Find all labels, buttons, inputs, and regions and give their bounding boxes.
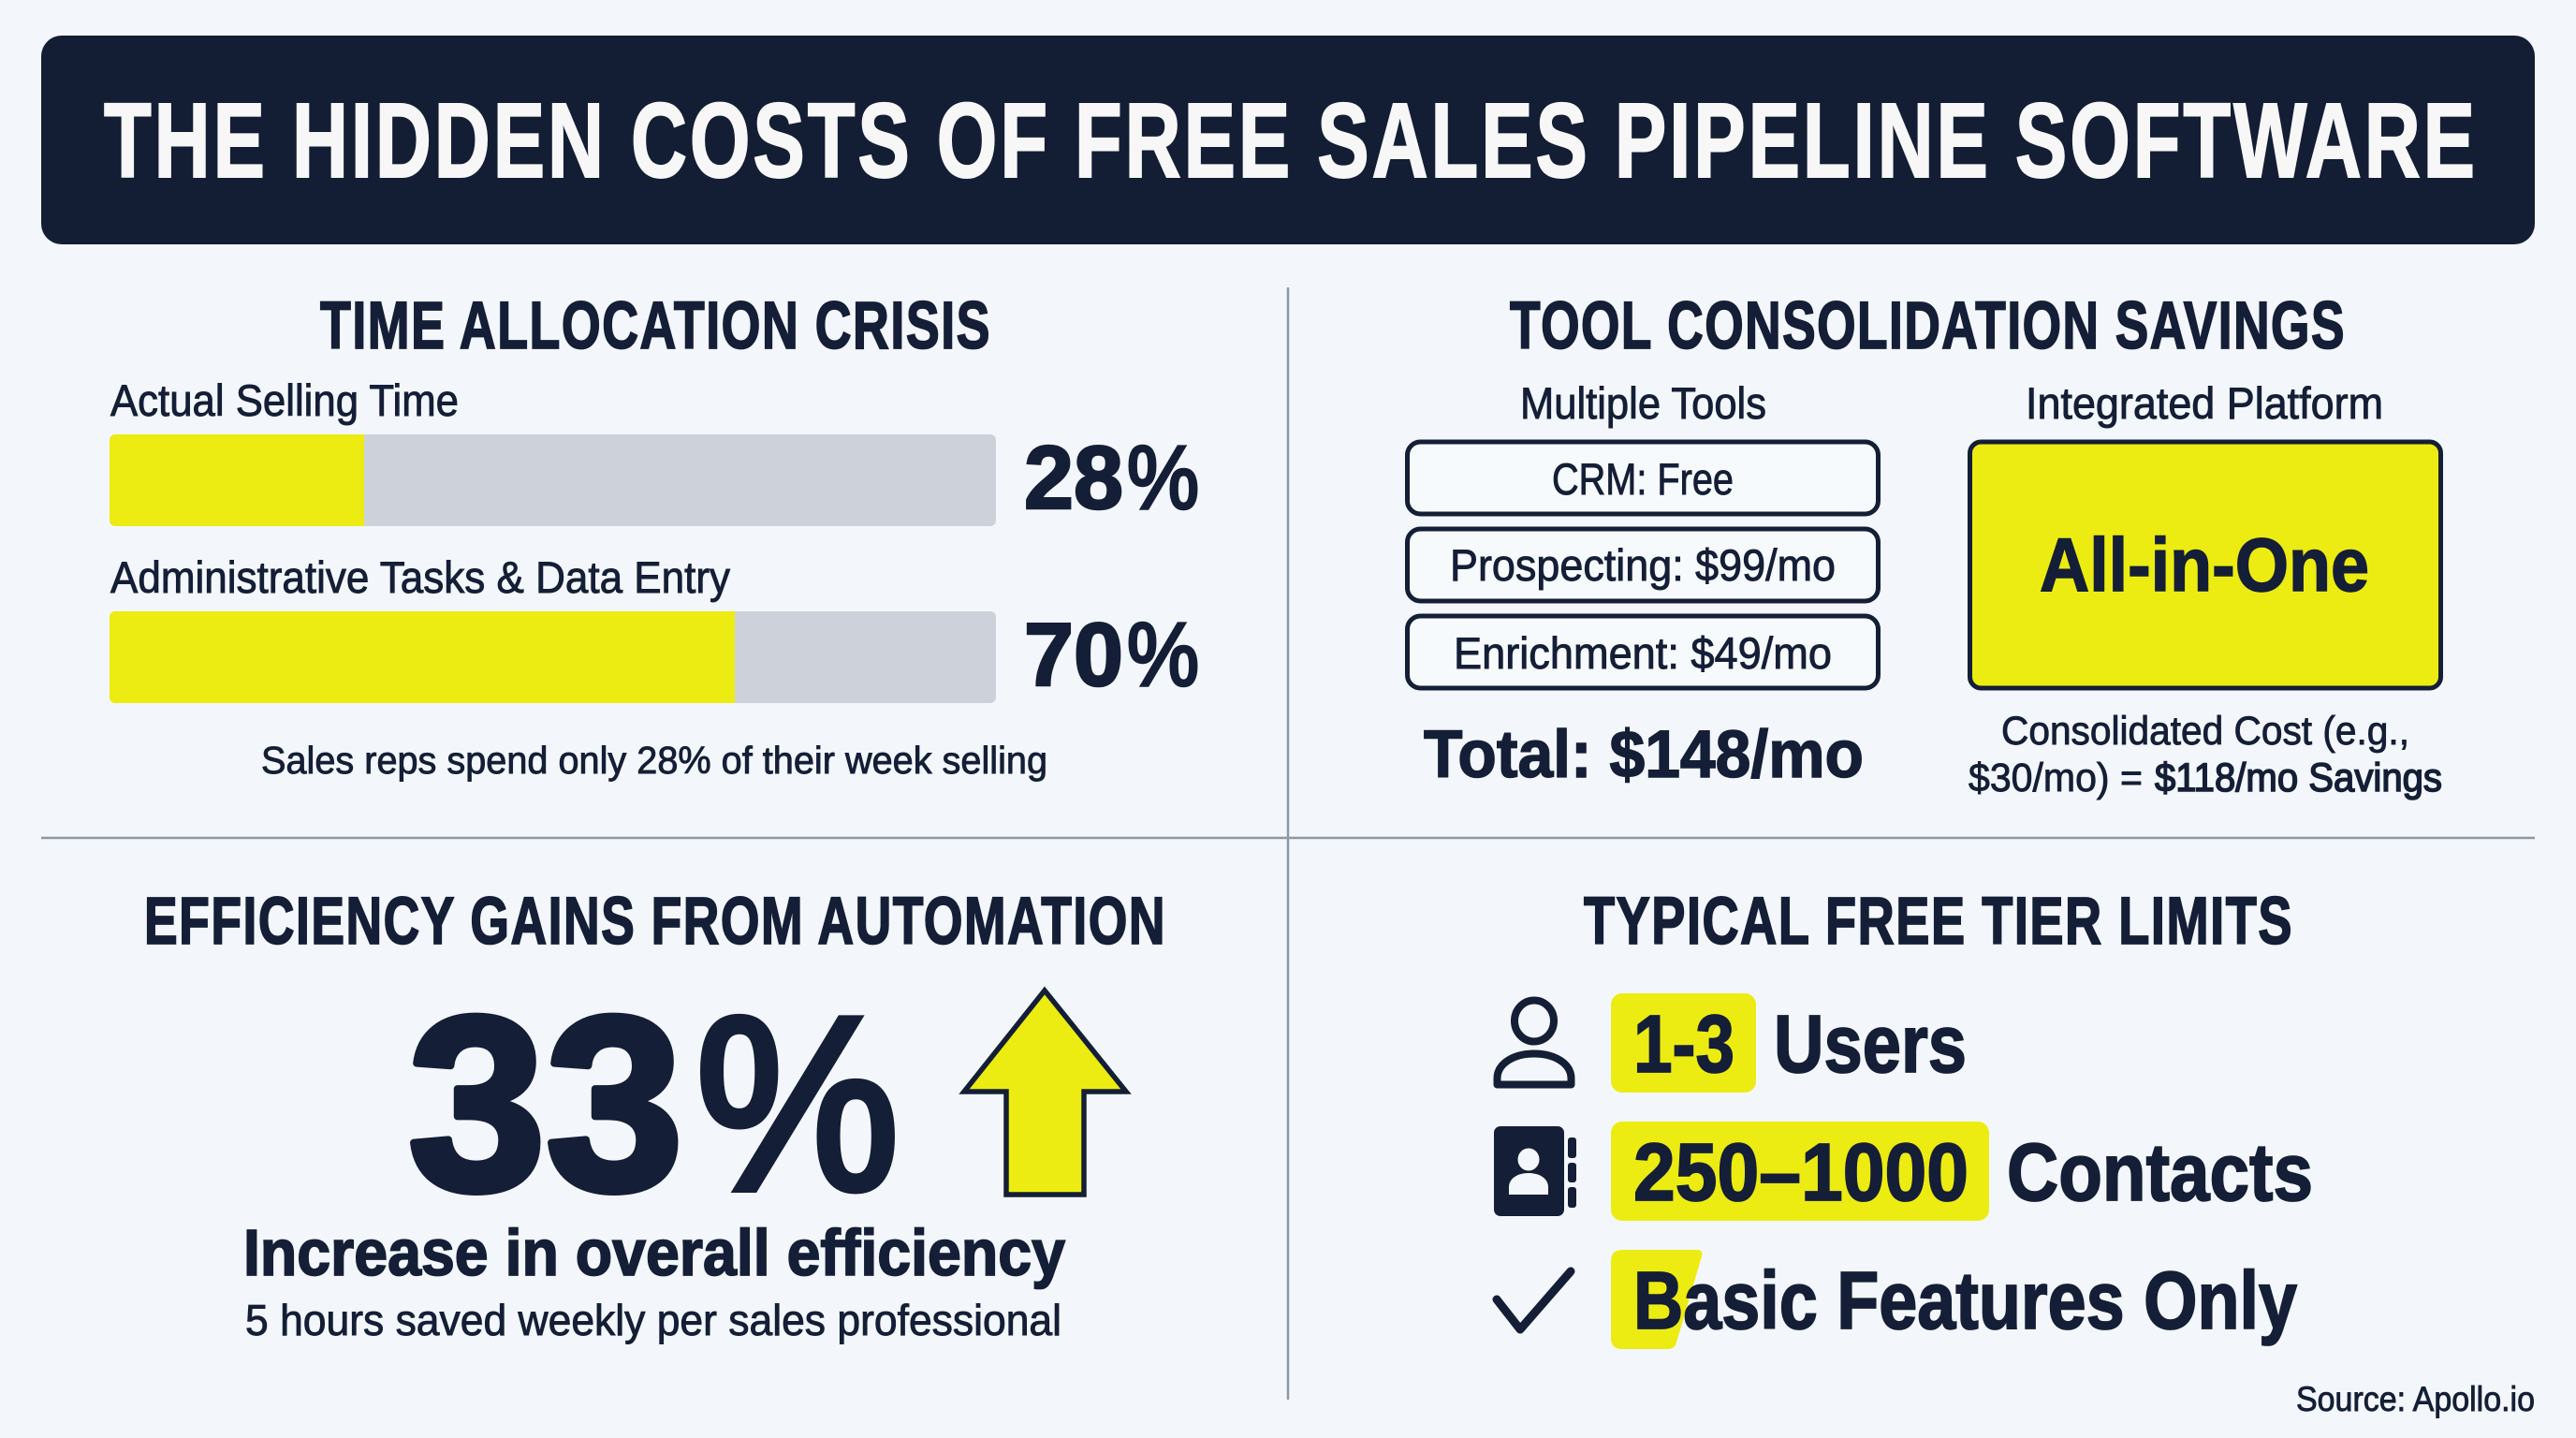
highlight row: contacts [1611, 1122, 2313, 1221]
consolidated cost note: $118/mo Savings [2155, 756, 2442, 800]
label: actual selling time: Actual Selling Time [110, 375, 459, 425]
stat sublabel: 5 hours saved weekly per sales professional [245, 1296, 1061, 1344]
panel: typical free tier limits [1494, 885, 2313, 1349]
panel: efficiency gains from automation [144, 885, 1166, 1344]
label: administrative tasks and data entry: Administrative Tasks & Data Entry [110, 552, 730, 602]
bar: actual selling time 28% [110, 434, 996, 526]
big stat: 33% [408, 965, 900, 1241]
tool box: crm: CRM: Free [1552, 454, 1734, 504]
title banner [41, 36, 2535, 244]
highlight row: basic features: Basic Features Only [1633, 1255, 2297, 1346]
value: 28%: % [1127, 428, 1199, 528]
tool box: enrichment: Enrichment: $49/mo [1454, 628, 1832, 678]
column label: integrated platform: Integrated Platform [2026, 378, 2383, 428]
panel: tool consolidation savings [1408, 289, 2442, 800]
highlight row: users: Users [1774, 999, 1967, 1090]
heading: efficiency gains: EFFICIENCY GAINS FROM AUTOMATION [144, 885, 1166, 959]
icon: check mark [1497, 1271, 1571, 1329]
highlight row: users [1611, 993, 1967, 1093]
consolidated cost note: Consolidated Cost (e.g., [2001, 709, 2409, 754]
all-in-one box: All-in-One [2040, 523, 2369, 608]
consolidated cost note: $30/mo) = [1969, 756, 2143, 800]
highlight row: contacts: Contacts [2007, 1127, 2313, 1218]
heading: time allocation crisis: TIME ALLOCATION CRISIS [320, 289, 991, 363]
all-in-one box [1969, 442, 2441, 688]
value: 70%: 70 [1024, 605, 1123, 705]
highlight row: contacts: 250–1000 [1633, 1127, 1969, 1218]
column label: multiple tools: Multiple Tools [1520, 378, 1766, 428]
highlight row: users: 1-3 [1633, 999, 1734, 1090]
heading: free tier limits: TYPICAL FREE TIER LIMITS [1584, 885, 2293, 959]
icon: contact book [1494, 1126, 1576, 1216]
stat label: Increase in overall efficiency [243, 1216, 1065, 1289]
value: 70% [1024, 605, 1199, 705]
big stat: 33%: % [695, 965, 900, 1241]
big stat: 33%: 33 [408, 965, 683, 1241]
caption: sales reps selling time: Sales reps spend only 28% of their week selling [261, 739, 1047, 782]
tool box: crm [1408, 442, 1878, 514]
source credit: Source: Apollo.io [2296, 1380, 2535, 1418]
tool box: enrichment [1408, 616, 1878, 688]
icon: user [1498, 1000, 1571, 1084]
value: 70%: % [1127, 605, 1199, 705]
value: 28% [1024, 428, 1199, 528]
panel: time allocation crisis [110, 289, 1199, 782]
tool box: prospecting: Prospecting: $99/mo [1450, 540, 1836, 590]
consolidated cost note [1969, 709, 2442, 800]
value: 28%: 28 [1024, 428, 1123, 528]
icon: up arrow [964, 990, 1126, 1195]
bar: administrative tasks 70% [110, 611, 996, 703]
total cost: Total: $148/mo [1424, 718, 1864, 792]
tool box: prospecting [1408, 529, 1878, 601]
